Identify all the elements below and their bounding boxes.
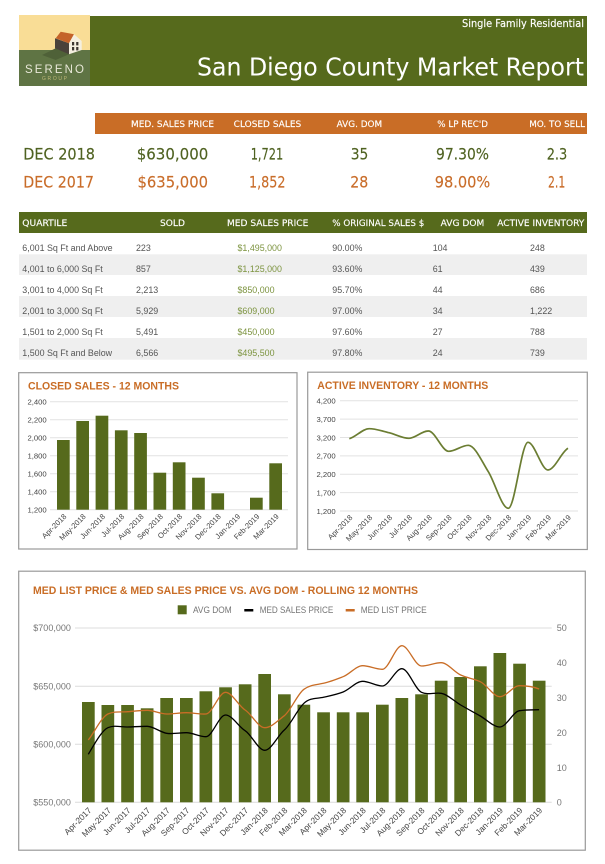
- x axis labels: active inventory: Jan-2019: [504, 513, 533, 542]
- axes and grid: 30: [557, 693, 567, 703]
- x axis labels: closed sales: Mar-2019: [251, 512, 281, 541]
- table row: 3,001 to 4,000: 44: [433, 285, 443, 295]
- axes and grid: $550,000: [33, 798, 71, 808]
- x axis labels: active inventory: Jul-2018: [387, 513, 414, 540]
- KPI row: Dec 2018: 2.3: [547, 144, 567, 163]
- x axis labels: active inventory: Jun-2018: [365, 513, 394, 542]
- legend: MED LIST PRICE: [361, 604, 427, 615]
- table header: MED SALES PRICE: [227, 219, 308, 229]
- y axis: active inventory: 1,700: [316, 488, 336, 497]
- y axis: closed sales: 2,000: [27, 434, 47, 442]
- x axis labels: closed sales: Aug-2018: [116, 512, 146, 542]
- x axis labels: active inventory: [326, 513, 573, 543]
- KPI header bar: MO. TO SELL: [529, 120, 585, 130]
- axes and grid: 0: [557, 798, 562, 808]
- y axis: closed sales: 2,400: [27, 398, 47, 406]
- x axis labels: rolling 12 months: Nov-2017: [198, 805, 231, 838]
- axes and grid: $600,000: [33, 740, 71, 750]
- panel: closed sales: [19, 373, 297, 549]
- table row: 1,501 to 2,000: $450,000: [238, 327, 275, 337]
- logo: Sereno Group: SERENO: [25, 64, 84, 76]
- x axis labels: rolling 12 months: Jan-2018: [238, 805, 270, 837]
- KPI row: Dec 2017: 28: [350, 172, 368, 191]
- header banner: [90, 16, 587, 86]
- KPI row: Dec 2017: 1,852: [249, 172, 286, 191]
- table row: 4,001 to 6,000: 61: [433, 264, 443, 274]
- KPI row: Dec 2017: 98.00%: [435, 172, 490, 191]
- line chart: active inventory: [349, 429, 568, 508]
- x axis labels: active inventory: Nov-2018: [464, 513, 493, 543]
- table row: 3,001 to 4,000: 3,001 to 4,000 Sq Ft: [22, 285, 103, 295]
- table row: 4,001 to 6,000: 93.60%: [332, 264, 363, 274]
- table row: 1,500 and below: $495,500: [238, 348, 275, 358]
- y axis: active inventory: 3,700: [316, 415, 336, 424]
- y axis: closed sales: 1,400: [27, 488, 47, 496]
- x axis labels: active inventory: Oct-2018: [445, 513, 474, 542]
- KPI header bar: MED. SALES PRICE: [131, 120, 214, 130]
- line series: med sales price: [88, 669, 539, 754]
- x axis labels: closed sales: [40, 512, 281, 542]
- table row: 3,001 to 4,000: [22, 285, 545, 295]
- x axis labels: closed sales: Jul-2018: [99, 512, 126, 539]
- quartile table: [19, 212, 587, 360]
- chart title: closed sales: CLOSED SALES - 12 MONTHS: [28, 381, 179, 393]
- panel: list price, sales price vs DOM: [19, 571, 585, 850]
- y axis: active inventory: [316, 396, 578, 516]
- table row: 4,001 to 6,000: 439: [530, 264, 545, 274]
- legend: AVG DOM: [193, 604, 232, 615]
- KPI row: Dec 2017: 2.1: [548, 172, 565, 191]
- table row: 6,001 and above: $1,495,000: [238, 243, 282, 253]
- axes and grid: 50: [557, 623, 567, 633]
- KPI header bar: CLOSED SALES: [234, 120, 301, 130]
- table row: 2,001 to 3,000: 97.00%: [332, 306, 363, 316]
- table header: [19, 212, 587, 233]
- axes and grid: 40: [557, 658, 567, 668]
- x axis labels: rolling 12 months: May-2018: [315, 805, 348, 839]
- x axis labels: rolling 12 months: Feb-2018: [257, 805, 290, 838]
- x axis labels: closed sales: Feb-2019: [232, 512, 261, 541]
- table row: 1,500 and below: 739: [530, 348, 545, 358]
- x axis labels: rolling 12 months: [62, 805, 544, 839]
- KPI row: Dec 2017: [23, 172, 565, 191]
- y axis: active inventory: 3,200: [316, 433, 336, 442]
- KPI row: Dec 2018: DEC 2018: [23, 144, 95, 163]
- bar chart: closed sales: [57, 416, 282, 510]
- x axis labels: rolling 12 months: Jul-2018: [358, 805, 388, 835]
- x axis labels: active inventory: Mar-2019: [544, 513, 573, 542]
- table header: % ORIGINAL SALES $: [332, 219, 424, 229]
- table row: 1,500 and below: [19, 338, 587, 360]
- y axis: closed sales: 2,200: [27, 416, 47, 424]
- x axis labels: rolling 12 months: Aug-2018: [374, 805, 407, 838]
- table row: 1,501 to 2,000: [22, 327, 545, 337]
- axes and grid: $650,000: [33, 682, 71, 692]
- x axis labels: closed sales: Jan-2019: [213, 512, 242, 541]
- x axis labels: rolling 12 months: Jan-2019: [473, 805, 505, 837]
- x axis labels: closed sales: Oct-2018: [156, 512, 184, 541]
- x axis labels: rolling 12 months: Aug-2017: [139, 805, 172, 838]
- table row: 6,001 and above: 6,001 Sq Ft and Above: [22, 243, 113, 253]
- x axis labels: rolling 12 months: Apr-2017: [62, 805, 94, 837]
- table row: 6,001 and above: 248: [530, 243, 545, 253]
- table row: 6,001 and above: 90.00%: [332, 243, 363, 253]
- bar series: avg DOM: [82, 653, 546, 802]
- table row: 3,001 to 4,000: 686: [530, 285, 545, 295]
- table row: 2,001 to 3,000: [19, 296, 587, 317]
- table row: 4,001 to 6,000: $1,125,000: [238, 264, 282, 274]
- x axis labels: rolling 12 months: Mar-2019: [512, 805, 544, 838]
- y axis: active inventory: 4,200: [316, 396, 336, 406]
- table row: 1,501 to 2,000: 788: [530, 327, 545, 337]
- x axis labels: rolling 12 months: Jul-2017: [122, 805, 152, 835]
- x axis labels: rolling 12 months: Dec-2017: [217, 805, 250, 838]
- title: San Diego County Market Report: [197, 52, 584, 82]
- x axis labels: closed sales: May-2018: [57, 512, 88, 542]
- panel: active inventory: [308, 372, 587, 550]
- table row: 1,501 to 2,000: 1,501 to 2,000 Sq Ft: [22, 327, 103, 337]
- KPI row: Dec 2018: 1,721: [251, 144, 283, 163]
- axes and grid: $700,000: [33, 623, 71, 633]
- table row: 6,001 and above: 104: [433, 243, 448, 253]
- y axis: active inventory: 2,700: [316, 452, 336, 461]
- x axis labels: rolling 12 months: Nov-2018: [433, 805, 466, 838]
- table row: 1,501 to 2,000: 97.60%: [332, 327, 363, 337]
- y axis: active inventory: 2,200: [316, 470, 336, 479]
- table row: 4,001 to 6,000: 4,001 to 6,000 Sq Ft: [22, 264, 103, 274]
- table row: 3,001 to 4,000: 95.70%: [332, 285, 363, 295]
- x axis labels: closed sales: Apr-2018: [40, 512, 68, 541]
- x axis labels: rolling 12 months: Feb-2019: [492, 805, 525, 838]
- table row: 2,001 to 3,000: 2,001 to 3,000 Sq Ft: [22, 306, 103, 316]
- table row: 4,001 to 6,000: [19, 254, 587, 275]
- table row: 2,001 to 3,000: 5,929: [136, 306, 158, 316]
- report type label: Single Family Residential: [462, 18, 584, 30]
- table row: 1,500 and below: 6,566: [136, 348, 158, 358]
- table header: SOLD: [160, 219, 185, 229]
- table row: 1,500 and below: 24: [433, 348, 443, 358]
- table header: QUARTILE: [22, 219, 67, 229]
- logo: Sereno Group: [19, 15, 90, 86]
- x axis labels: rolling 12 months: Mar-2018: [277, 805, 309, 838]
- y axis: closed sales: 1,800: [27, 452, 47, 460]
- KPI row: Dec 2018: 35: [351, 144, 368, 163]
- x axis labels: closed sales: Nov-2018: [174, 512, 204, 542]
- table header: ACTIVE INVENTORY: [497, 219, 585, 229]
- x axis labels: rolling 12 months: May-2017: [80, 805, 113, 839]
- y axis: active inventory: 1,200: [316, 507, 336, 516]
- x axis labels: active inventory: Feb-2019: [524, 513, 553, 542]
- KPI row: Dec 2017: $635,000: [138, 172, 208, 191]
- table row: 1,501 to 2,000: 5,491: [136, 327, 158, 337]
- x axis labels: active inventory: Aug-2018: [404, 513, 434, 543]
- logo: Sereno Group: GROUP: [42, 76, 68, 82]
- legend: MED SALES PRICE: [260, 604, 333, 615]
- y axis: closed sales: 1,600: [27, 470, 47, 478]
- axes and grid: 20: [557, 728, 567, 738]
- line series: med list price: [88, 646, 539, 740]
- KPI row: Dec 2018: [23, 144, 567, 163]
- y axis: closed sales: 1,200: [27, 506, 47, 514]
- axes and grid: 10: [557, 763, 567, 773]
- KPI header bar: AVG. DOM: [337, 120, 382, 130]
- x axis labels: rolling 12 months: Sep-2018: [394, 805, 427, 838]
- table row: 2,001 to 3,000: 34: [433, 306, 443, 316]
- legend: [178, 604, 427, 615]
- x axis labels: rolling 12 months: Jun-2017: [101, 805, 133, 837]
- table row: 6,001 and above: 223: [136, 243, 151, 253]
- chart title: rolling 12 months: MED LIST PRICE & MED SALES PRICE VS. AVG DOM - ROLLING 12 MONTHS: [33, 585, 418, 597]
- x axis labels: active inventory: May-2018: [344, 513, 374, 543]
- y axis: closed sales: [27, 398, 288, 514]
- KPI row: Dec 2018: 97.30%: [436, 144, 489, 163]
- x axis labels: rolling 12 months: Dec-2018: [453, 805, 486, 838]
- x axis labels: rolling 12 months: Sep-2017: [159, 805, 192, 838]
- x axis labels: active inventory: Dec-2018: [484, 513, 513, 543]
- table row: 2,001 to 3,000: $609,000: [238, 306, 275, 316]
- x axis labels: active inventory: Apr-2018: [326, 513, 354, 542]
- table header: AVG DOM: [441, 219, 484, 229]
- x axis labels: rolling 12 months: Oct-2018: [415, 805, 446, 837]
- KPI header bar: [95, 113, 587, 134]
- x axis labels: rolling 12 months: Jun-2018: [336, 805, 368, 837]
- x axis labels: active inventory: Sep-2018: [424, 513, 454, 543]
- KPI row: Dec 2018: $630,000: [137, 144, 208, 163]
- KPI row: Dec 2017: DEC 2017: [23, 172, 94, 191]
- table row: 1,501 to 2,000: 27: [433, 327, 443, 337]
- KPI header bar: % LP REC'D: [437, 120, 488, 130]
- x axis labels: closed sales: Jun-2018: [78, 512, 107, 541]
- table row: 3,001 to 4,000: $850,000: [238, 285, 275, 295]
- x axis labels: rolling 12 months: Oct-2017: [180, 805, 211, 837]
- axes and grid: [33, 623, 567, 808]
- x axis labels: rolling 12 months: Apr-2018: [297, 805, 329, 837]
- table row: 1,500 and below: 97.80%: [332, 348, 363, 358]
- table row: 1,500 and below: 1,500 Sq Ft and Below: [22, 348, 113, 358]
- table row: 6,001 and above: [22, 243, 545, 253]
- table row: 4,001 to 6,000: 857: [136, 264, 151, 274]
- x axis labels: closed sales: Sep-2018: [135, 512, 165, 542]
- table row: 3,001 to 4,000: 2,213: [136, 285, 158, 295]
- table row: 2,001 to 3,000: 1,222: [530, 306, 552, 316]
- x axis labels: closed sales: Dec-2018: [193, 512, 223, 542]
- chart title: active inventory: ACTIVE INVENTORY - 12 MONTHS: [317, 380, 488, 392]
